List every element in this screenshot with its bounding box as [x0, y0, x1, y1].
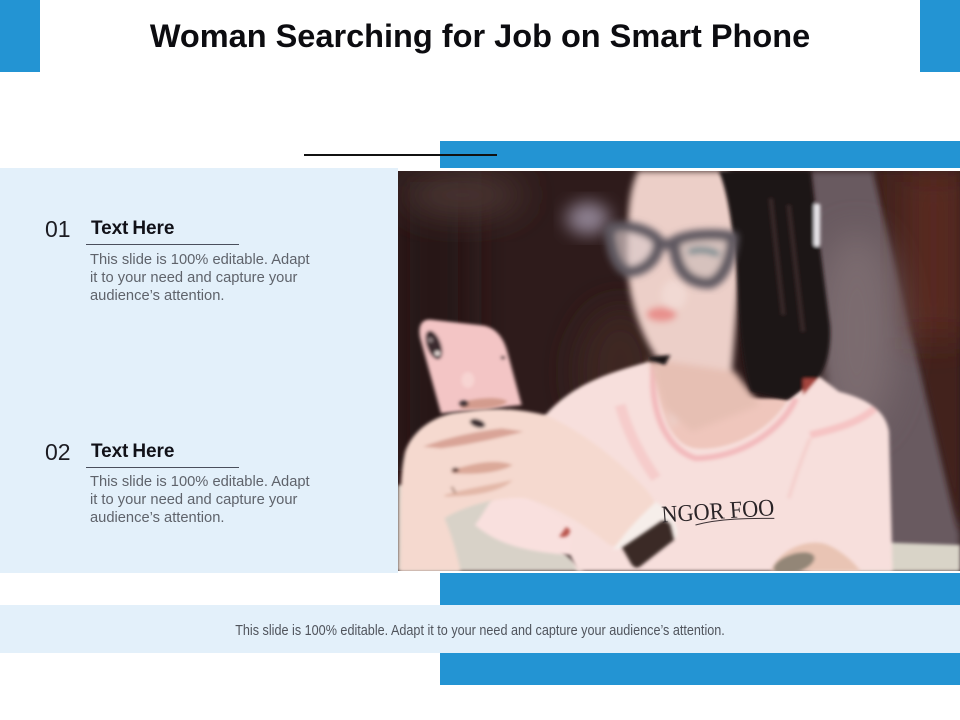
description 02: This slide is 100% editable. Adapt: [90, 474, 310, 490]
woman: right arm: [770, 543, 860, 579]
photo background: [398, 171, 960, 571]
smartwatch: [613, 502, 677, 568]
photo: woman looking at smartphone: [398, 171, 960, 571]
item 02: [45, 439, 310, 526]
short black line: [304, 154, 497, 156]
description 02: audience’s attention.: [90, 510, 224, 526]
woman: glasses: [609, 227, 733, 283]
corner accent: top left: [0, 0, 40, 72]
t-shirt lettering: NGOR FOO: [661, 495, 775, 528]
smartphone: [419, 320, 522, 413]
blue bar: lower: [440, 573, 960, 685]
description 01: audience’s attention.: [90, 288, 224, 304]
heading 01: Text Here: [91, 218, 174, 239]
blue bar: top: [440, 141, 960, 168]
description 02: [90, 474, 310, 526]
item 01: [45, 216, 310, 304]
description 01: [90, 252, 310, 304]
footer text: This slide is 100% editable. Adapt it to your need and capture your audience’s attention.: [235, 623, 725, 639]
number 01: 01: [45, 216, 71, 242]
heading 02: Text Here: [91, 441, 174, 462]
number 02: 02: [45, 439, 71, 465]
description 02: it to your need and capture your: [90, 492, 297, 508]
title: Woman Searching for Job on Smart Phone: [150, 18, 810, 54]
rule 02: [86, 467, 239, 468]
hands: [400, 398, 659, 571]
woman: face and neck: [627, 171, 760, 432]
description 01: This slide is 100% editable. Adapt: [90, 252, 310, 268]
corner accent: top right: [920, 0, 960, 72]
woman: hair: [649, 171, 830, 400]
description 01: it to your need and capture your: [90, 270, 297, 286]
woman: torso and t-shirt: [475, 362, 893, 571]
footer strip: [0, 605, 960, 653]
rule 01: [86, 244, 239, 245]
panel: light blue text panel: [0, 168, 398, 573]
